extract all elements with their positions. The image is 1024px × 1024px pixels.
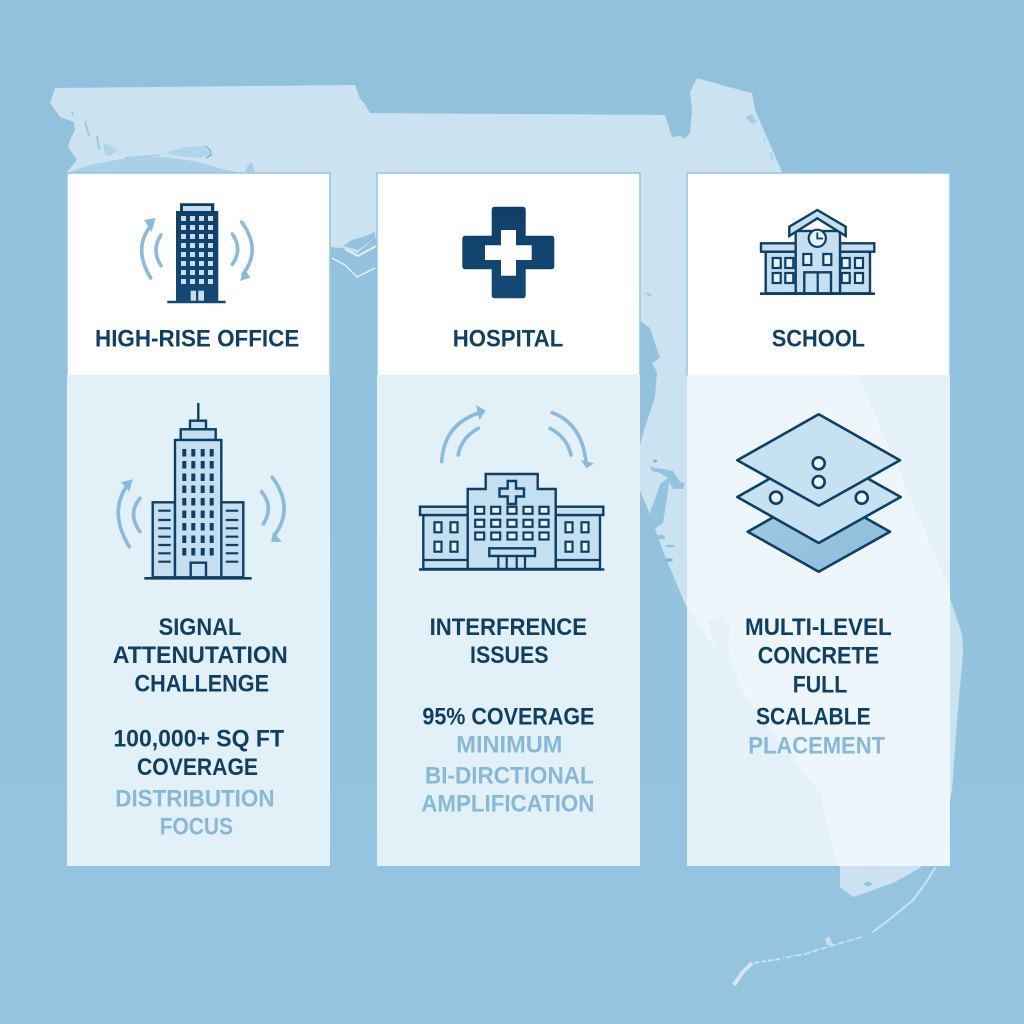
panel: hospital <box>377 173 640 866</box>
text block: interference and coverage: ISSUES <box>470 642 548 669</box>
text block: challenge and coverage: FOCUS <box>160 813 233 840</box>
text block: construction and placement <box>745 614 892 759</box>
text block: challenge and coverage: CHALLENGE <box>134 671 269 698</box>
lower card <box>377 375 640 866</box>
text block: construction and placement: PLACEMENT <box>748 732 885 759</box>
text block: interference and coverage: INTERFRENCE <box>430 614 587 641</box>
text block: challenge and coverage: 100,000+ SQ FT <box>113 726 284 753</box>
text block: challenge and coverage <box>113 614 288 840</box>
icon: school building <box>760 210 875 294</box>
text block: challenge and coverage: COVERAGE <box>137 754 258 781</box>
text block: construction and placement: SCALABLE <box>756 703 871 730</box>
text block: interference and coverage: AMPLIFICATION <box>421 791 594 818</box>
text block: interference and coverage: 95% COVERAGE <box>422 703 594 730</box>
icon: hospital building with bi-directional arcs <box>419 405 604 570</box>
icon: medical cross <box>462 207 554 298</box>
text block: construction and placement: CONCRETE <box>758 642 879 669</box>
text block: interference and coverage: MINIMUM <box>456 731 562 758</box>
heading: HOSPITAL <box>453 326 563 353</box>
icon: stacked concrete floors <box>737 414 901 572</box>
upper card <box>377 173 640 376</box>
text block: interference and coverage: BI-DIRCTIONAL <box>425 762 594 789</box>
text block: interference and coverage <box>421 614 594 818</box>
heading: HIGH-RISE OFFICE <box>95 326 299 353</box>
text block: construction and placement: FULL <box>793 671 847 698</box>
icon: office tower with signal arcs <box>142 203 252 303</box>
lower card <box>687 375 950 866</box>
upper card <box>687 173 950 376</box>
text block: construction and placement: MULTI-LEVEL <box>745 614 892 641</box>
panel: high-rise office <box>67 173 330 866</box>
text block: challenge and coverage: DISTRIBUTION <box>115 786 274 813</box>
icon: skyscraper with signal arcs <box>118 403 284 578</box>
lower card <box>67 375 330 866</box>
upper card <box>67 173 330 376</box>
faint map showing through lower card <box>687 375 950 866</box>
map: Florida silhouette <box>50 78 963 985</box>
text block: challenge and coverage: SIGNAL <box>159 614 241 641</box>
panel: school <box>687 173 950 866</box>
text block: challenge and coverage: ATTENUTATION <box>113 642 288 669</box>
faint harbor showing through lower card <box>708 614 742 690</box>
heading: SCHOOL <box>772 326 865 353</box>
